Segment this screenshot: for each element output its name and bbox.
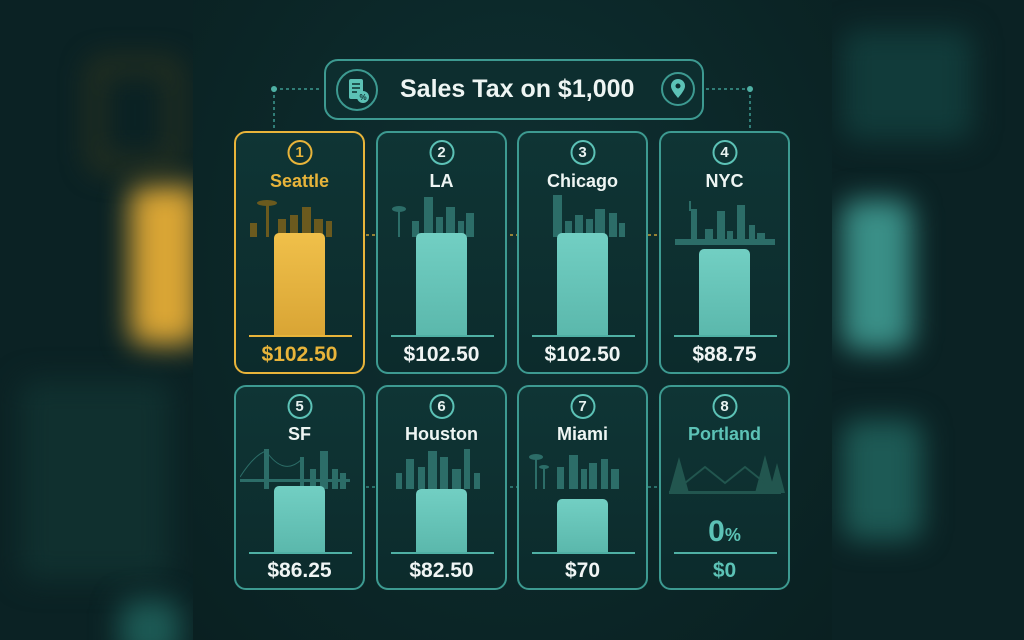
card: Chicago: 3	[578, 144, 587, 161]
card: LA: LA	[430, 171, 454, 191]
card: NYC: $88.75	[692, 343, 757, 366]
card: SF	[234, 385, 365, 590]
title	[324, 59, 704, 120]
card: LA	[376, 131, 507, 374]
card: Miami: 7	[578, 398, 587, 415]
card: Miami	[517, 385, 648, 590]
card: SF: $86.25	[267, 559, 332, 582]
card: LA: 2	[437, 144, 446, 161]
left blurred background	[0, 0, 193, 640]
card: Portland: 0%	[708, 515, 741, 548]
card: Portland: $0	[713, 559, 736, 582]
card: Seattle	[234, 131, 365, 374]
card: Miami: $70	[565, 559, 600, 582]
card: Seattle: Seattle	[270, 171, 329, 191]
card: SF: 5	[295, 398, 304, 415]
icon: tax document: %	[359, 93, 367, 102]
card: Chicago	[517, 131, 648, 374]
card: SF: SF	[288, 424, 311, 444]
card: Houston	[376, 385, 507, 590]
card: Houston: Houston	[405, 424, 478, 444]
card: Portland: Portland	[688, 424, 761, 444]
main panel	[193, 0, 832, 640]
card: Chicago: $102.50	[545, 343, 620, 366]
title: Sales Tax on $1,000	[400, 75, 634, 103]
card: Seattle: 1	[295, 144, 304, 161]
icon: tax document	[336, 69, 378, 111]
card: NYC	[659, 131, 790, 374]
card: Houston: 6	[437, 398, 446, 415]
card: NYC: 4	[720, 144, 729, 161]
card: Miami: Miami	[557, 424, 608, 444]
card: Portland	[659, 385, 790, 590]
icon: location pin	[661, 72, 695, 106]
card: Houston: $82.50	[409, 559, 474, 582]
card: Chicago: Chicago	[547, 171, 618, 191]
card: Portland: 8	[720, 398, 729, 415]
card: NYC: NYC	[705, 171, 744, 191]
card: LA: $102.50	[404, 343, 479, 366]
card: Seattle: $102.50	[262, 343, 337, 366]
right blurred background	[832, 0, 1024, 640]
